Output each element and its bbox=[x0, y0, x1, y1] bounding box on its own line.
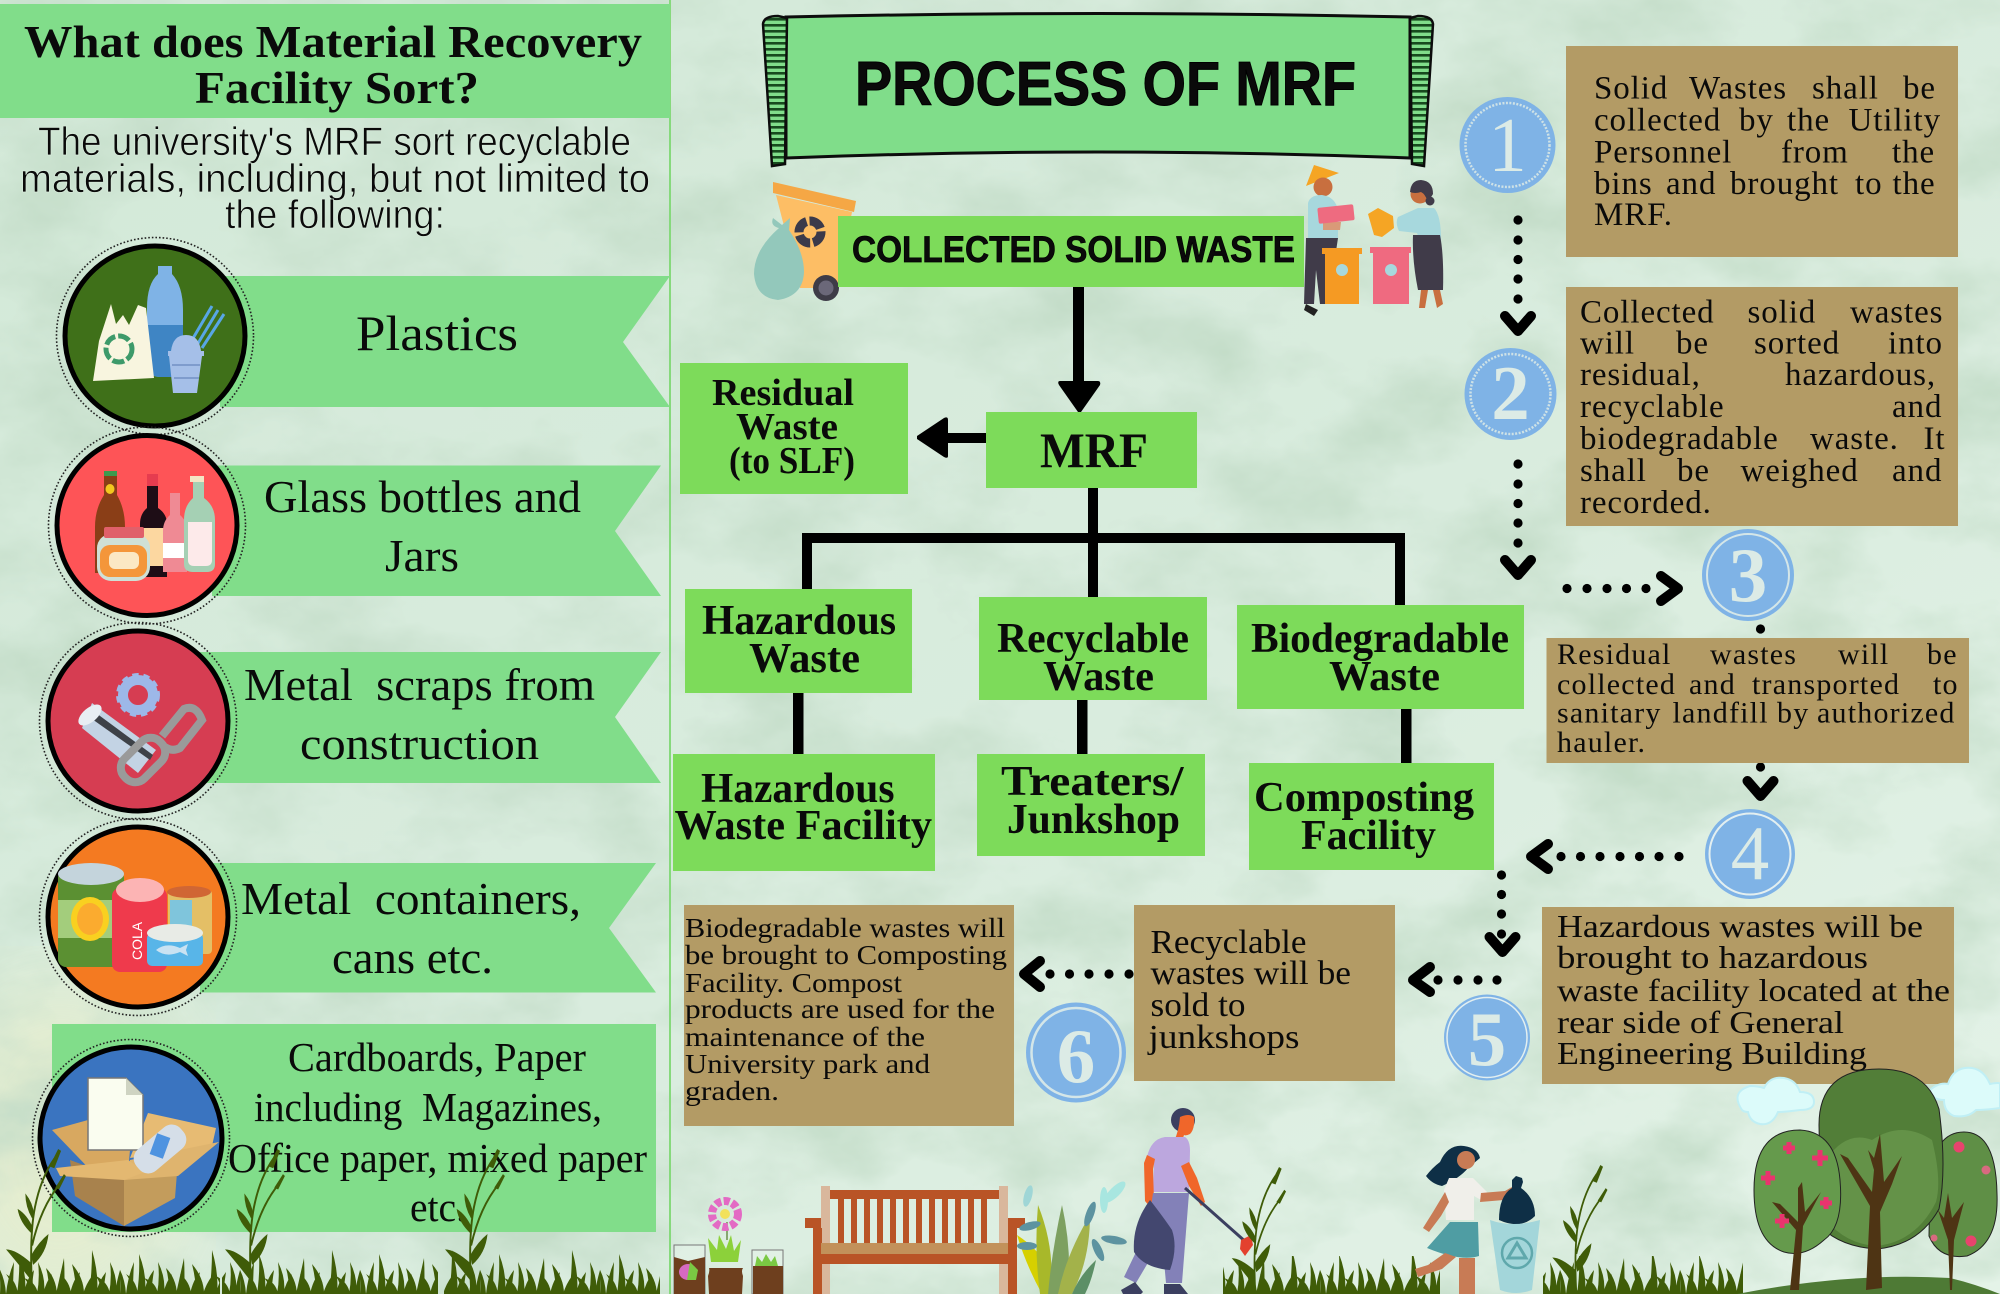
step 5 text: recyclable: wastes will be bbox=[1150, 955, 1351, 992]
step 5 text: recyclable: junkshops bbox=[1147, 1019, 1300, 1056]
box: biodegradable waste bbox=[1237, 605, 1524, 709]
step 2 number bbox=[1464, 348, 1556, 440]
step 6 text: maintenance of the bbox=[685, 1021, 925, 1052]
box: composting facility bbox=[1249, 763, 1494, 870]
icon: people sorting waste bbox=[1304, 165, 1443, 316]
step 2 text bbox=[1566, 287, 1958, 526]
illustration: wooden bench bbox=[805, 1186, 1025, 1294]
step 1 text: MRF. bbox=[1594, 197, 1673, 233]
box: hazardous waste: Waste bbox=[749, 636, 860, 682]
step 3 text: collected bbox=[1557, 668, 1676, 701]
step 1 text bbox=[1566, 46, 1958, 257]
step 1 text: the bbox=[1787, 102, 1830, 138]
title banner bbox=[763, 14, 1433, 166]
box: MRF bbox=[986, 412, 1197, 488]
item: glass bottles and jars: Glass bottles and bbox=[264, 471, 581, 522]
step 2 text: sorted bbox=[1754, 326, 1840, 362]
step 2 text: hazardous, bbox=[1785, 357, 1936, 393]
step 4 text: rear side of General bbox=[1557, 1004, 1844, 1040]
mid grass and plant bbox=[1223, 1167, 1440, 1294]
tree: right bbox=[1929, 1132, 1997, 1290]
item: metal containers: Metal containers, bbox=[241, 873, 581, 924]
tree: centre bbox=[1819, 1069, 1943, 1290]
step 6 text: products are used for the bbox=[685, 993, 995, 1024]
step 2 text: Collected bbox=[1580, 294, 1715, 330]
box: MRF: MRF bbox=[1040, 422, 1148, 478]
step 1 text: brought bbox=[1730, 166, 1839, 202]
step 3 number bbox=[1702, 529, 1794, 621]
box: treaters / junkshop: Junkshop bbox=[1007, 797, 1180, 843]
step 3 text: will bbox=[1838, 638, 1889, 671]
left grass and plants bbox=[0, 1149, 660, 1294]
step 1 text: and bbox=[1666, 166, 1716, 202]
item: cardboards and paper bbox=[32, 1024, 656, 1236]
step 6 text: be brought to Composting bbox=[685, 939, 1007, 970]
left panel: what MRF sorts bbox=[0, 4, 670, 1294]
illustration: clouds bbox=[1738, 1068, 2000, 1124]
banner scroll right bbox=[1410, 16, 1433, 166]
box: hazardous waste facility bbox=[673, 754, 935, 871]
step 1 text: the bbox=[1892, 134, 1935, 170]
step 1 text: shall bbox=[1812, 70, 1879, 106]
illustration: plant pots bbox=[674, 1201, 783, 1294]
step 6 text: Facility. Compost bbox=[685, 967, 902, 998]
left heading: Facility Sort? bbox=[195, 62, 479, 113]
item: glass bottles and jars: Jars bbox=[385, 530, 459, 581]
box: biodegradable waste: Biodegradable bbox=[1251, 616, 1509, 662]
intro text: The university's MRF sort recyclable bbox=[38, 120, 631, 164]
box: treaters / junkshop bbox=[977, 754, 1205, 856]
item: metal scraps bbox=[40, 622, 661, 820]
illustration: trees and hill bbox=[1737, 1069, 2000, 1294]
icon: plastic bottle, bag, cup bbox=[93, 266, 224, 393]
intro text bbox=[20, 120, 650, 237]
item: plastics: Plastics bbox=[356, 305, 518, 361]
illustration: girl and recycling bin bbox=[1415, 1146, 1540, 1294]
box: hazardous waste facility: Hazardous bbox=[701, 766, 894, 812]
step 6 text bbox=[684, 905, 1014, 1126]
arrow: collected to MRF bbox=[1058, 287, 1100, 412]
illustration: spiky plant bbox=[1017, 1179, 1128, 1294]
arrow: down to step 5 bbox=[1490, 870, 1516, 952]
item: glass bottles and jars bbox=[48, 427, 661, 624]
left heading bbox=[0, 4, 670, 118]
box: composting facility: Composting bbox=[1254, 775, 1474, 821]
box: hazardous waste facility: Waste Facility bbox=[674, 803, 932, 849]
icon: cans: COLA bbox=[129, 921, 145, 960]
box: composting facility: Facility bbox=[1301, 813, 1436, 859]
step 2 text: into bbox=[1888, 326, 1943, 362]
item: plastics bbox=[56, 238, 670, 434]
step 5 number bbox=[1444, 994, 1530, 1082]
banner title: PROCESS OF MRF bbox=[855, 50, 1356, 119]
step 1 number: 1 bbox=[1488, 102, 1527, 188]
flow connector tree bbox=[793, 488, 1412, 763]
step 1 text: collected bbox=[1594, 102, 1721, 138]
icon: cans bbox=[58, 863, 212, 972]
step 3 number: 3 bbox=[1729, 532, 1767, 618]
step 1 text: from bbox=[1781, 134, 1849, 170]
step 2 text: It bbox=[1924, 421, 1945, 457]
step 3 text: transported bbox=[1752, 668, 1900, 701]
box: recyclable waste: Waste bbox=[1043, 654, 1154, 700]
arrow: step 2 down bbox=[1505, 459, 1531, 575]
box: hazardous waste: Hazardous bbox=[702, 598, 896, 644]
step 1 text: Wastes bbox=[1689, 70, 1787, 106]
arrow: to step 3 bbox=[1562, 576, 1678, 601]
step 3 text: by bbox=[1777, 696, 1809, 730]
step 4 text bbox=[1542, 907, 1954, 1084]
step 6 text: graden. bbox=[685, 1075, 779, 1106]
step 2 text: shall bbox=[1580, 453, 1647, 489]
box: residual waste: (to SLF) bbox=[729, 440, 855, 482]
item: metal containers: cans etc. bbox=[332, 932, 493, 983]
item: metal scraps: Metal scraps from bbox=[244, 659, 595, 710]
step 2 text: waste. bbox=[1810, 421, 1899, 457]
step 5 text: recyclable: Recyclable bbox=[1150, 924, 1306, 961]
right grass and plant bbox=[1543, 1165, 1743, 1294]
step 3 text: sanitary bbox=[1557, 696, 1662, 730]
arrow: step 4 to facility bbox=[1531, 844, 1684, 869]
item: cardboards and paper: Office paper, mixed paper bbox=[228, 1135, 647, 1181]
step 5 text: recyclable bbox=[1134, 905, 1395, 1081]
item: metal scraps: construction bbox=[300, 718, 539, 769]
step 2 text: biodegradable bbox=[1580, 421, 1779, 457]
intro text: materials, including, but not limited to bbox=[20, 157, 650, 201]
box: residual waste: Residual bbox=[712, 372, 854, 414]
icon: glass bottles bbox=[95, 471, 215, 581]
step 4 text: waste facility located at the bbox=[1557, 972, 1950, 1008]
arrow: step 3 to 4 bbox=[1748, 781, 1774, 796]
step 6 number bbox=[1026, 1002, 1126, 1102]
step 3 text: hauler. bbox=[1557, 726, 1646, 759]
step 2 text: will bbox=[1580, 326, 1635, 362]
step 6 text: Biodegradable wastes will bbox=[685, 912, 1005, 943]
step 2 text: solid bbox=[1748, 294, 1816, 330]
item: cardboards and paper: etc. bbox=[410, 1184, 466, 1230]
box: collected solid waste bbox=[838, 216, 1304, 287]
left heading: What does Material Recovery bbox=[24, 16, 642, 67]
step 3 text: and bbox=[1689, 668, 1736, 701]
item: cardboards and paper: including Magazines, bbox=[254, 1084, 602, 1130]
banner scroll left bbox=[763, 16, 787, 166]
step 3 text: authorized bbox=[1817, 696, 1956, 730]
box: residual waste: Waste bbox=[736, 406, 838, 448]
icon: gear, pipe, chain bbox=[75, 676, 202, 788]
step 3 text: landfill bbox=[1672, 696, 1769, 730]
tree: left bbox=[1754, 1130, 1841, 1290]
step 2 text: residual, bbox=[1580, 357, 1701, 393]
box: biodegradable waste: Waste bbox=[1329, 654, 1440, 700]
illustration: man collecting litter bbox=[1121, 1108, 1253, 1294]
step 2 text: be bbox=[1676, 326, 1709, 362]
box: recyclable waste bbox=[979, 597, 1207, 700]
step 2 text: weighed bbox=[1740, 453, 1859, 489]
step 5 number: 5 bbox=[1468, 996, 1506, 1082]
step 3 text bbox=[1546, 624, 1969, 772]
step 3 text: Residual bbox=[1557, 638, 1672, 671]
item: cardboards and paper: Cardboards, Paper bbox=[288, 1034, 586, 1080]
step 4 text: Hazardous wastes will be bbox=[1557, 908, 1923, 944]
box: hazardous waste bbox=[685, 589, 912, 693]
arrow: step 5 to recyclable text bbox=[1413, 967, 1502, 992]
step 4 number bbox=[1705, 809, 1795, 899]
step 3 text: wastes bbox=[1710, 638, 1797, 671]
step 2 text: and bbox=[1892, 389, 1942, 425]
box: residual waste bbox=[680, 363, 908, 494]
step 4 number: 4 bbox=[1731, 810, 1769, 896]
step 1 text: to bbox=[1855, 166, 1882, 202]
step 1 text: Personnel bbox=[1594, 134, 1732, 170]
intro text: the following: bbox=[225, 193, 445, 237]
step 1 text: be bbox=[1903, 70, 1936, 106]
step 2 text: and bbox=[1892, 453, 1942, 489]
step 4 text: brought to hazardous bbox=[1557, 939, 1868, 975]
arrow: step 1 to 2 bbox=[1505, 215, 1531, 331]
icon: box and paper bbox=[52, 1078, 219, 1226]
step 1 text: by bbox=[1739, 102, 1774, 138]
step 2 text: recorded. bbox=[1580, 485, 1712, 521]
box: treaters / junkshop: Treaters/ bbox=[1001, 759, 1185, 805]
step 2 text: be bbox=[1677, 453, 1710, 489]
box: recyclable waste: Recyclable bbox=[997, 616, 1189, 662]
step 3 text: to bbox=[1933, 668, 1959, 701]
step 1 text: the bbox=[1892, 166, 1936, 202]
step 2 text: recyclable bbox=[1580, 389, 1725, 425]
arrow: MRF to residual bbox=[917, 417, 986, 458]
box: collected solid waste: COLLECTED SOLID WASTE bbox=[852, 229, 1295, 270]
step 1 text: bins bbox=[1594, 166, 1653, 202]
icon: orange bin and bag bbox=[754, 182, 856, 301]
step 2 text: wastes bbox=[1850, 294, 1943, 330]
step 6 text: University park and bbox=[685, 1048, 930, 1079]
step 2 number: 2 bbox=[1491, 350, 1530, 436]
step 5 text: recyclable: sold to bbox=[1150, 987, 1246, 1024]
step 1 number bbox=[1460, 97, 1556, 193]
arrow: recyclable to biodegradable text bbox=[1024, 961, 1134, 987]
step 3 text: be bbox=[1927, 638, 1958, 671]
item: metal containers bbox=[40, 818, 656, 1016]
step 1 text: Utility bbox=[1848, 102, 1941, 138]
step 6 number: 6 bbox=[1057, 1013, 1095, 1099]
step 4 text: Engineering Building bbox=[1557, 1035, 1867, 1071]
step 1 text: Solid bbox=[1594, 70, 1668, 106]
